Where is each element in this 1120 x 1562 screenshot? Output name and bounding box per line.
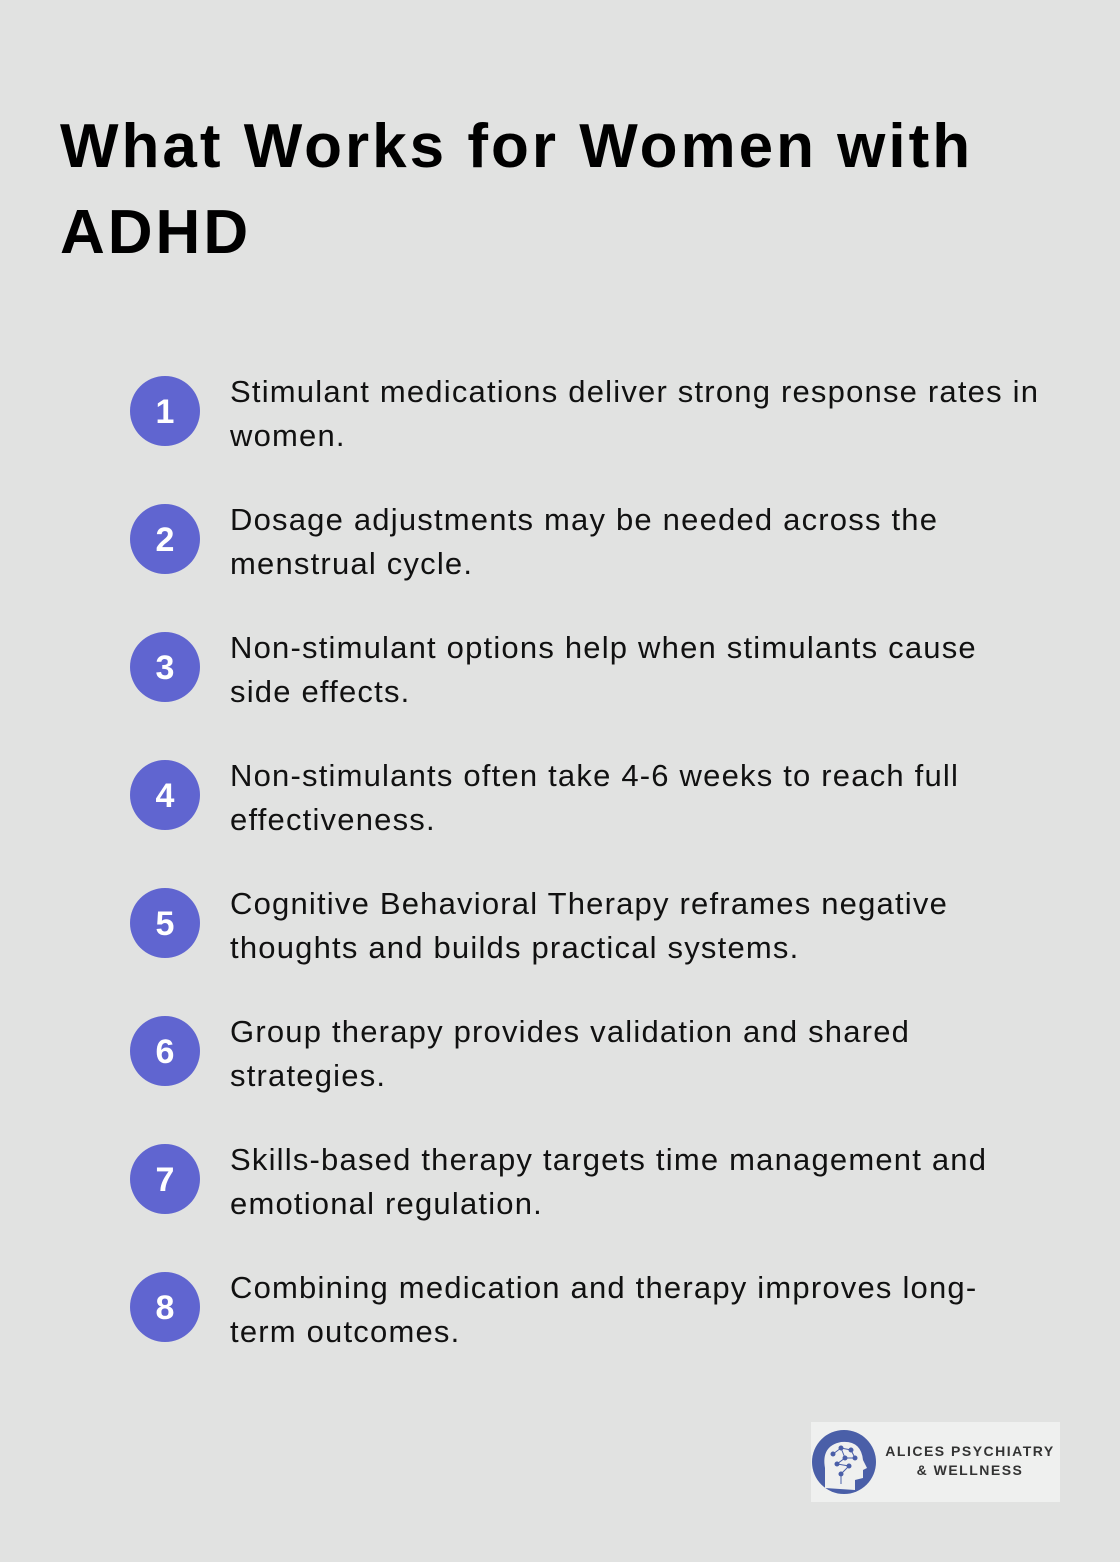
item 2: menstrual cycle. [230,546,473,581]
item 3: 3 [156,649,174,687]
item 5: thoughts and builds practical systems. [230,930,799,965]
item 2: Dosage adjustments may be needed across the [230,502,938,537]
item 7: 7 [156,1161,174,1199]
item 4: 4 [156,777,174,815]
item 4 [130,758,959,837]
item 5: 5 [156,905,174,943]
item 7: Skills-based therapy targets time management and [230,1142,987,1177]
item 1: 1 [156,393,174,431]
logo text [885,1443,1055,1478]
item 6 [130,1014,910,1093]
title: What Works for Women with [60,112,973,181]
logo text: & WELLNESS [917,1462,1023,1478]
item 8: 8 [156,1289,174,1327]
item 2: 2 [156,521,174,559]
item 5: Cognitive Behavioral Therapy reframes negative [230,886,948,921]
item 7: emotional regulation. [230,1186,543,1221]
item 1 [130,374,1039,453]
item 3: side effects. [230,674,410,709]
item 2 [130,502,938,581]
item 4: Non-stimulants often take 4-6 weeks to reach full [230,758,959,793]
item 6: Group therapy provides validation and shared [230,1014,910,1049]
item 3 [130,630,977,709]
logo text: ALICES PSYCHIATRY [885,1443,1055,1459]
item 4: effectiveness. [230,802,436,837]
item 3: Non-stimulant options help when stimulants cause [230,630,977,665]
item 6: strategies. [230,1058,386,1093]
logo [811,1422,1060,1502]
item 8: Combining medication and therapy improves long- [230,1270,977,1305]
title [60,112,973,267]
item 8: term outcomes. [230,1314,460,1349]
item 1: women. [230,418,346,453]
item 8 [130,1270,977,1349]
title: ADHD [60,198,251,267]
item 6: 6 [156,1033,174,1071]
item 7 [130,1142,987,1221]
logo icon [812,1430,876,1494]
item 1: Stimulant medications deliver strong response rates in [230,374,1039,409]
item 5 [130,886,948,965]
